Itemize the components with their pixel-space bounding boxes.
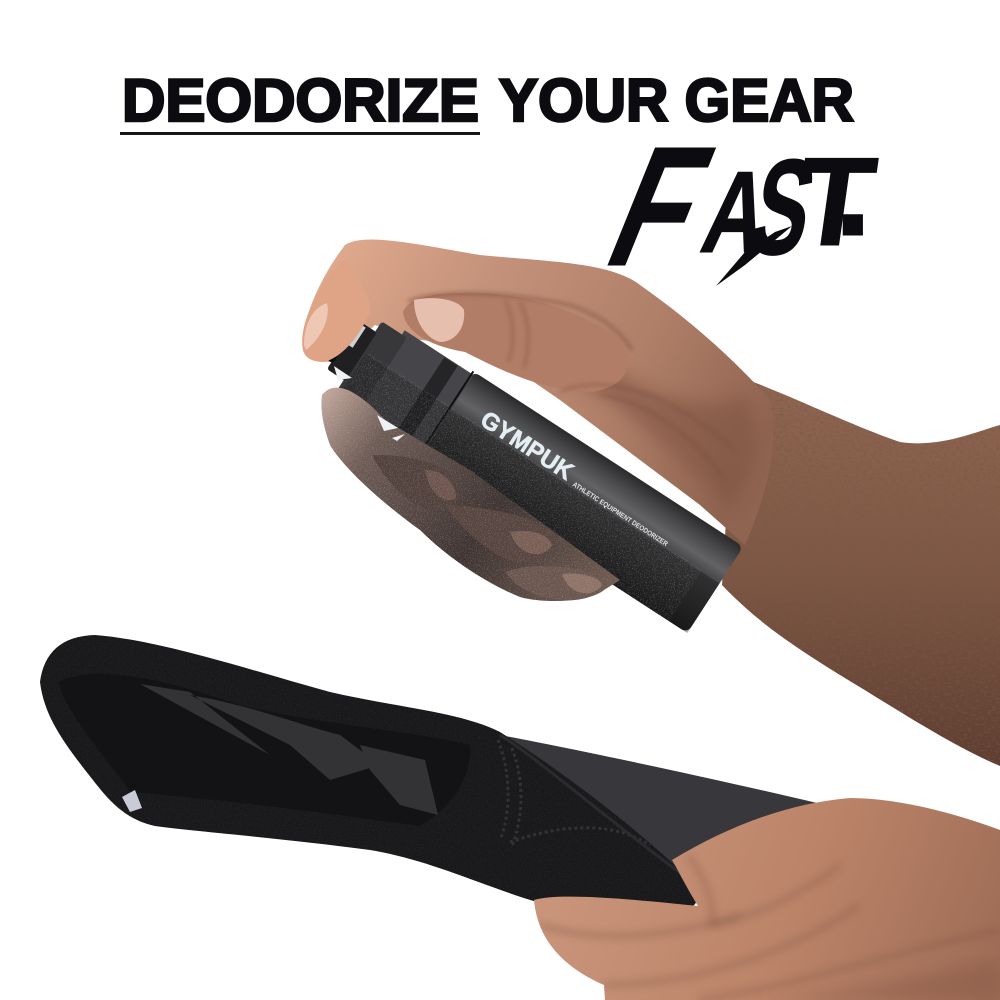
heading: deodorize your gear: DEODORIZE: [122, 67, 479, 134]
photo: forearm and hand holding spray bottle: [300, 240, 1000, 766]
heading: deodorize your gear: YOUR GEAR: [499, 67, 854, 134]
finger: ring nail: [562, 574, 602, 593]
heading: deodorize your gear: [122, 67, 854, 134]
finger: ring: [505, 566, 603, 600]
bottle cap ring: [334, 321, 407, 411]
bottle nozzle: [327, 321, 377, 381]
spray grain over fingers: [321, 388, 620, 601]
brush streak on fast: [716, 226, 792, 286]
brush heading: fast: F: [585, 111, 735, 301]
bottle neck: [352, 330, 473, 456]
glove inner camouflage: [140, 684, 438, 815]
brush heading: fast: T: [788, 131, 883, 272]
glove tag: [122, 790, 142, 812]
heading underline: [120, 132, 480, 135]
bottle body: [417, 371, 743, 633]
finger: middle: [445, 505, 554, 563]
finger: index: [372, 455, 459, 511]
lower hand palm behind spray: [321, 388, 620, 601]
finger: index nail: [425, 470, 456, 500]
glove knit grain: [40, 635, 697, 910]
bottle junction line: [418, 371, 474, 456]
brush heading: fast: A: [693, 147, 781, 277]
glove outer: [40, 635, 697, 910]
brush heading: fast: [585, 111, 883, 301]
bottle grain: [333, 352, 702, 621]
glove neoprene cuff: [500, 735, 817, 880]
brush heading: fast: S: [739, 132, 827, 284]
palm and fingers: [534, 798, 1000, 1000]
bottle subtitle: ATHLETIC EQUIPMENT DEODORIZER: [571, 481, 669, 548]
spray bottle: [300, 295, 743, 633]
glove inner opening: [58, 674, 470, 826]
bottle tip: [318, 315, 358, 364]
spray highlight marks: [334, 366, 405, 441]
glove sole highlight: [500, 735, 690, 880]
finger: middle nail: [510, 531, 552, 554]
bottle chrome: [347, 324, 366, 348]
hand folds and finger creases: [540, 855, 1000, 1000]
thumb knuckle wrinkles: [505, 300, 735, 480]
bottle logo: GYMPUK: [475, 406, 579, 486]
forearm: [722, 375, 1000, 766]
hand shadow crease: [584, 370, 753, 498]
forearm hair texture: [722, 375, 1000, 766]
brush heading: fast: .: [834, 112, 872, 264]
back of hand: [303, 240, 773, 545]
thumb nail: [414, 298, 464, 342]
glove seam stitching: [498, 740, 650, 846]
bottle lower shade: [333, 354, 719, 633]
thumb: [403, 293, 627, 392]
fingernail: index: [304, 303, 328, 350]
bottle collar band: [392, 357, 458, 446]
photo: lower hand pulling glove: [534, 798, 1000, 1000]
photo: black glove: [40, 635, 817, 910]
fingertip: [302, 258, 370, 362]
crease between finger and thumb: [408, 293, 632, 350]
